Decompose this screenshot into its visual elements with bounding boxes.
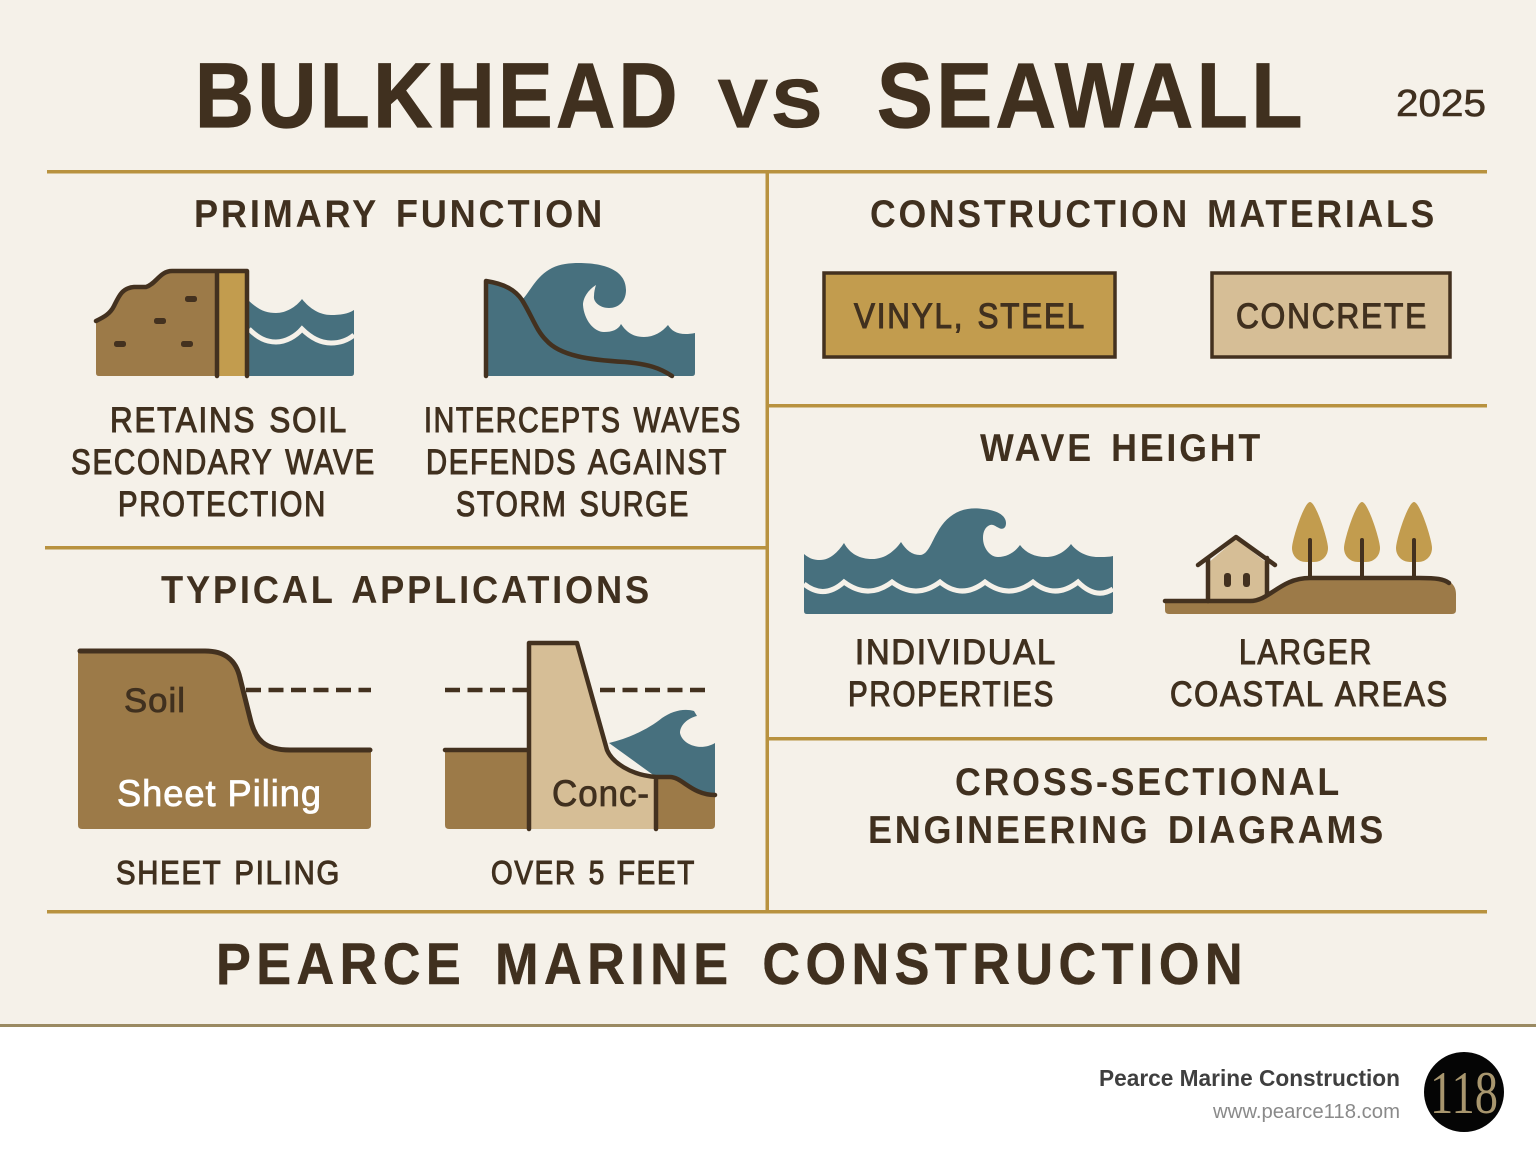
label: sheet piling: SHEET PILING [116, 854, 341, 891]
logo: 118 badge: 118 [1430, 1060, 1498, 1126]
label: larger coastal areas: COASTAL AREAS [1170, 675, 1449, 714]
diagram: sheet piling cross-section: Sheet Piling [117, 773, 322, 814]
label: seawall function: DEFENDS AGAINST [426, 443, 728, 482]
panel: typical applications [78, 569, 715, 891]
title [195, 45, 1306, 147]
panel: construction materials [824, 193, 1450, 357]
label: bulkhead function: PROTECTION [118, 485, 327, 524]
brand line: PEARCE MARINE CONSTRUCTION [216, 932, 1248, 997]
footer company name: Pearce Marine Construction [1099, 1065, 1400, 1091]
title: SEAWALL [877, 45, 1306, 147]
label: seawall function: STORM SURGE [456, 485, 690, 524]
diagram: sheet piling cross-section: Soil [124, 682, 186, 720]
logo: 118 badge [1424, 1052, 1504, 1132]
material: vinyl, steel: VINYL, STEEL [854, 297, 1086, 336]
panel: cross-sectional engineering diagrams: CROSS-SECTIONAL [955, 761, 1342, 804]
diagram: sheet piling cross-section [78, 650, 371, 829]
icon: seawall intercepting wave [486, 263, 695, 376]
heading: typical applications: TYPICAL APPLICATIONS [161, 569, 652, 612]
title: BULKHEAD [195, 45, 681, 147]
panel: cross-sectional engineering diagrams [868, 761, 1386, 852]
label: individual properties: INDIVIDUAL [855, 633, 1057, 672]
panel: wave height [804, 427, 1456, 714]
year: 2025 [1396, 83, 1486, 125]
label: bulkhead function: RETAINS SOIL [110, 401, 348, 440]
panel: primary function [71, 193, 742, 524]
icon: small waves [804, 508, 1113, 614]
label: over 5 feet: OVER 5 FEET [491, 854, 696, 891]
icon: bulkhead retaining soil [96, 271, 354, 376]
diagram: concrete seawall cross-section [445, 643, 715, 829]
heading: primary function: PRIMARY FUNCTION [194, 193, 605, 236]
material: concrete [1212, 273, 1450, 357]
icon: coastal land with house and trees [1165, 502, 1456, 614]
label: seawall function: INTERCEPTS WAVES [424, 401, 742, 440]
label: seawall function [424, 401, 742, 524]
footer website: www.pearce118.com [1212, 1101, 1400, 1123]
title: VS [718, 66, 826, 142]
material: concrete: CONCRETE [1236, 297, 1428, 336]
diagram: concrete seawall cross-section: Conc- [552, 773, 650, 814]
label: individual properties [848, 633, 1057, 714]
label: bulkhead function [71, 401, 376, 524]
heading: wave height: WAVE HEIGHT [980, 427, 1263, 470]
label: larger coastal areas [1170, 633, 1449, 714]
material: vinyl, steel [824, 273, 1115, 357]
heading: construction materials: CONSTRUCTION MATERIALS [870, 193, 1437, 236]
label: individual properties: PROPERTIES [848, 675, 1055, 714]
label: larger coastal areas: LARGER [1239, 633, 1373, 672]
label: bulkhead function: SECONDARY WAVE [71, 443, 376, 482]
panel: cross-sectional engineering diagrams: ENGINEERING DIAGRAMS [868, 809, 1386, 852]
